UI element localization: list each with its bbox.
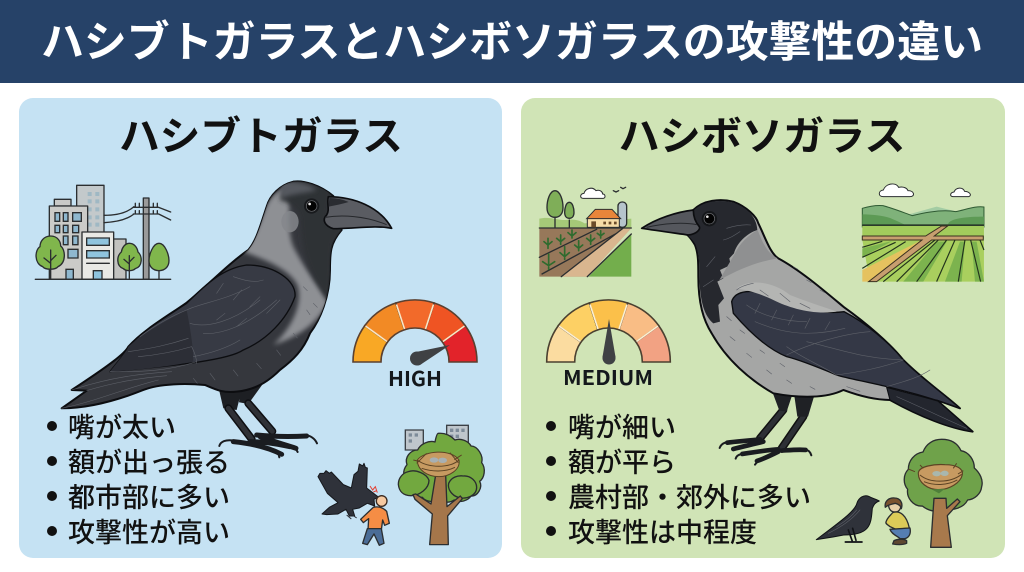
dark hood xyxy=(677,201,757,323)
bullet list: hashiboso traits: 攻撃性は中程度 xyxy=(568,518,757,548)
gauge: high aggression xyxy=(353,300,477,392)
belly feather marks xyxy=(193,287,317,383)
bullet list: hashibuto traits: 攻撃性が高い xyxy=(68,518,230,548)
grey neck and chest xyxy=(243,181,343,345)
tail xyxy=(887,387,973,432)
wing xyxy=(732,291,960,408)
body silhouette xyxy=(673,200,973,432)
icon: crow attacking person beside nest tree xyxy=(318,425,484,545)
body feather marks xyxy=(727,267,860,391)
bullet list: hashibuto traits: 額が出っ張る xyxy=(68,448,230,478)
bullet list: hashibuto traits: 嘴が太い xyxy=(68,413,176,443)
icon: farm and rural scenes xyxy=(539,184,984,282)
eye xyxy=(702,211,717,226)
heading: ハシブトガラス: ハシブトガラス xyxy=(119,115,403,159)
farm with house xyxy=(539,187,631,277)
heading: ハシボソガラス: ハシボソガラス xyxy=(618,115,906,159)
wing xyxy=(110,265,295,372)
bullet list: hashiboso traits xyxy=(546,413,811,548)
bullet list: hashibuto traits: 都市部に多い xyxy=(68,483,230,513)
bullet list: hashiboso traits: 額が平ら xyxy=(568,448,676,478)
body silhouette xyxy=(62,181,342,408)
bullet list: hashibuto traits xyxy=(47,413,230,548)
legs and feet xyxy=(218,383,317,457)
illustration: hashiboso crow xyxy=(642,200,973,465)
legs and feet xyxy=(720,390,814,465)
gauge: medium aggression: MEDIUM xyxy=(563,361,653,391)
panel: ハシボソガラス xyxy=(521,98,1005,558)
title banner xyxy=(0,0,1024,83)
eye xyxy=(304,198,319,214)
beak xyxy=(324,197,392,229)
icon: city buildings and utility pole xyxy=(35,185,171,279)
gauge: medium aggression xyxy=(547,300,670,391)
title banner: ハシブトガラスとハシボソガラスの攻撃性の違い xyxy=(41,19,983,67)
bullet list: hashiboso traits: 嘴が細い xyxy=(568,413,676,443)
beak xyxy=(642,210,700,235)
illustration: hashibuto crow xyxy=(62,181,392,457)
bullet list: hashiboso traits: 農村部・郊外に多い xyxy=(568,483,811,513)
icon: crow and crouching person beside nest tree xyxy=(816,439,982,547)
gauge: high aggression: HIGH xyxy=(388,362,442,392)
panel: ハシブトガラス xyxy=(19,98,502,558)
fields with hills xyxy=(862,184,984,282)
